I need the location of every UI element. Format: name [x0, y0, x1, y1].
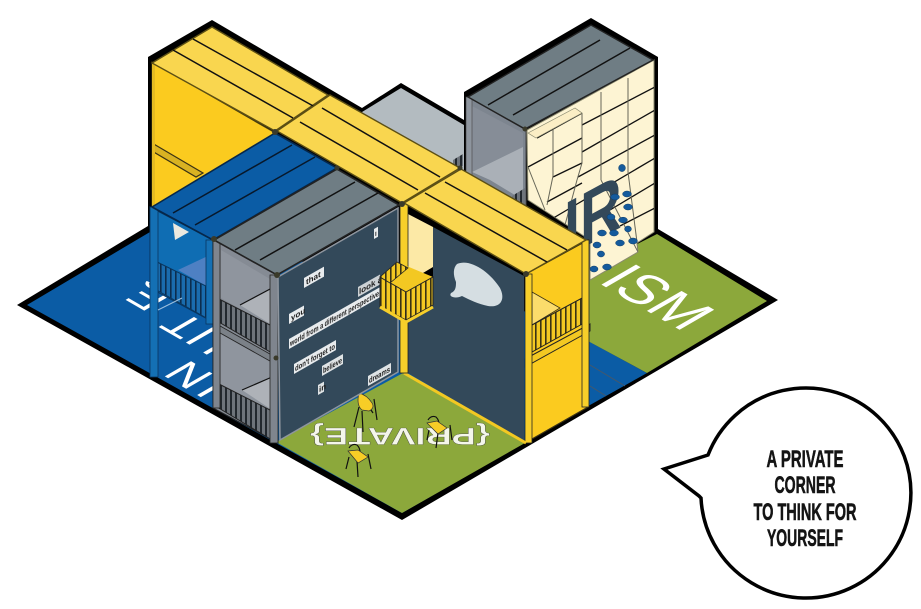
chair 2 [427, 416, 452, 448]
panel: blue container tower [150, 207, 213, 377]
chair 3 [346, 444, 371, 477]
panel: yellow roof two [277, 95, 460, 203]
callout text: YOURSELF [767, 525, 843, 552]
panel: blue roof [152, 133, 337, 240]
grey mid frame [213, 322, 277, 365]
yellow front post [400, 203, 408, 373]
text: floor word ISM: ISM [586, 256, 728, 339]
text: floor word on blue: I [186, 373, 239, 404]
wall poem words: look at [359, 272, 385, 296]
panel: green floor right [586, 234, 767, 396]
speech bubble callout [664, 388, 911, 598]
corner castings [211, 126, 529, 360]
panel: grey roof [214, 169, 399, 275]
callout text: TO THINK FOR [754, 499, 856, 526]
icon: speech bubble on wall [450, 263, 502, 306]
panel: grey back tower [453, 97, 526, 217]
wall poem words: in [319, 381, 326, 394]
wall poem words [289, 227, 391, 395]
panel: grey container tower front [213, 238, 278, 443]
blue balcony rail [153, 260, 210, 320]
yellow balcony [380, 262, 433, 322]
panel: dark wall with poem [278, 208, 398, 440]
wall poem words: that [306, 269, 321, 287]
text: wall letters: IR [564, 158, 622, 275]
text: floor word on blue: F [117, 279, 182, 317]
text: floor word PRIVATE: {PRIVATE} [310, 422, 490, 449]
wall poem words: don't forget to [295, 341, 335, 373]
cream doorway [408, 214, 433, 282]
yellow floor trim [404, 373, 526, 443]
callout text: CORNER [774, 472, 836, 499]
panel: cream climbing wall [527, 60, 655, 280]
panel: blue floor [27, 232, 647, 513]
wall poem words: believe [323, 355, 342, 375]
grey upper rail [217, 298, 272, 353]
callout text: A PRIVATE [766, 446, 844, 473]
panel: back grey roof [468, 25, 653, 129]
panel: yellow roof one [152, 27, 328, 131]
icon: white triangle [173, 223, 189, 240]
panel: yellow back tower wall [152, 62, 277, 210]
callout text [754, 446, 856, 552]
blue support posts [150, 207, 213, 377]
text: floor word on blue: I [192, 330, 245, 361]
panel: yellow right tower side [525, 240, 590, 443]
blue climbing holds [590, 164, 637, 272]
yellow rail [532, 297, 584, 352]
black silhouette outline [17, 18, 778, 520]
text: floor word on blue: T [150, 306, 216, 344]
text: floor word on blue: S [135, 267, 187, 297]
panel: dark wall with speech bubble [404, 227, 526, 443]
wall poem words: you [291, 305, 305, 323]
panel: grey back floor [362, 88, 464, 190]
chair 1 [354, 393, 377, 432]
text: floor word on blue: N [154, 355, 224, 395]
panel: yellow roof three [404, 169, 586, 274]
wall poem words: I [375, 231, 377, 238]
wall poem words: dreams [369, 364, 390, 385]
text: floor word on blue [117, 267, 245, 404]
text: floor word on blue: I [175, 320, 228, 351]
wall poem words: world from a different perspective [289, 288, 379, 349]
panel: green floor front [276, 373, 525, 513]
grey lower rail [217, 383, 272, 440]
